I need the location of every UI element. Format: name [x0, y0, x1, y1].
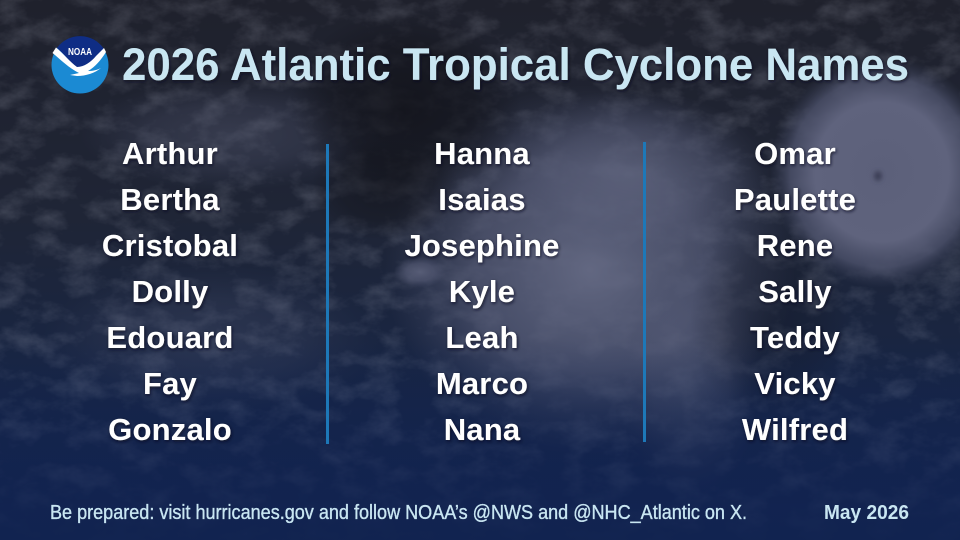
- column divider: left: [326, 144, 329, 444]
- names column 1: Gonzalo: [108, 412, 232, 447]
- title: 2026 Atlantic Tropical Cyclone Names: [122, 39, 909, 90]
- names column 2: Kyle: [449, 274, 515, 309]
- footer: call to action: Be prepared: visit hurricanes.gov and follow NOAA’s @NWS and @NHC_Atlantic on X.: [50, 502, 747, 524]
- names column 2: Nana: [444, 412, 521, 447]
- names column 2: [404, 136, 560, 447]
- names column 1: Bertha: [120, 182, 220, 217]
- names column 1: Fay: [143, 366, 198, 401]
- names column 1: Arthur: [122, 136, 218, 171]
- names column 2: Josephine: [404, 228, 560, 263]
- names column 3: Vicky: [754, 366, 836, 401]
- names column 1: Edouard: [106, 320, 234, 355]
- names column 3: Paulette: [734, 182, 856, 217]
- names column 3: Omar: [754, 136, 836, 171]
- names column 2: Isaias: [438, 182, 526, 217]
- names column 3: Rene: [757, 228, 833, 263]
- names column 3: Teddy: [750, 320, 841, 355]
- column divider: right: [643, 142, 646, 442]
- names column 3: Wilfred: [742, 412, 848, 447]
- names column 2: Hanna: [434, 136, 530, 171]
- logo wordmark: NOAA: [68, 46, 92, 58]
- names column 2: Marco: [436, 366, 528, 401]
- names column 1: [102, 136, 238, 447]
- names column 3: Sally: [758, 274, 832, 309]
- logo: NOAA: [52, 36, 108, 94]
- footer: date: May 2026: [824, 502, 909, 524]
- names column 2: Leah: [445, 320, 519, 355]
- names column 3: [734, 136, 856, 447]
- names column 1: Cristobal: [102, 228, 238, 263]
- names column 1: Dolly: [132, 274, 209, 309]
